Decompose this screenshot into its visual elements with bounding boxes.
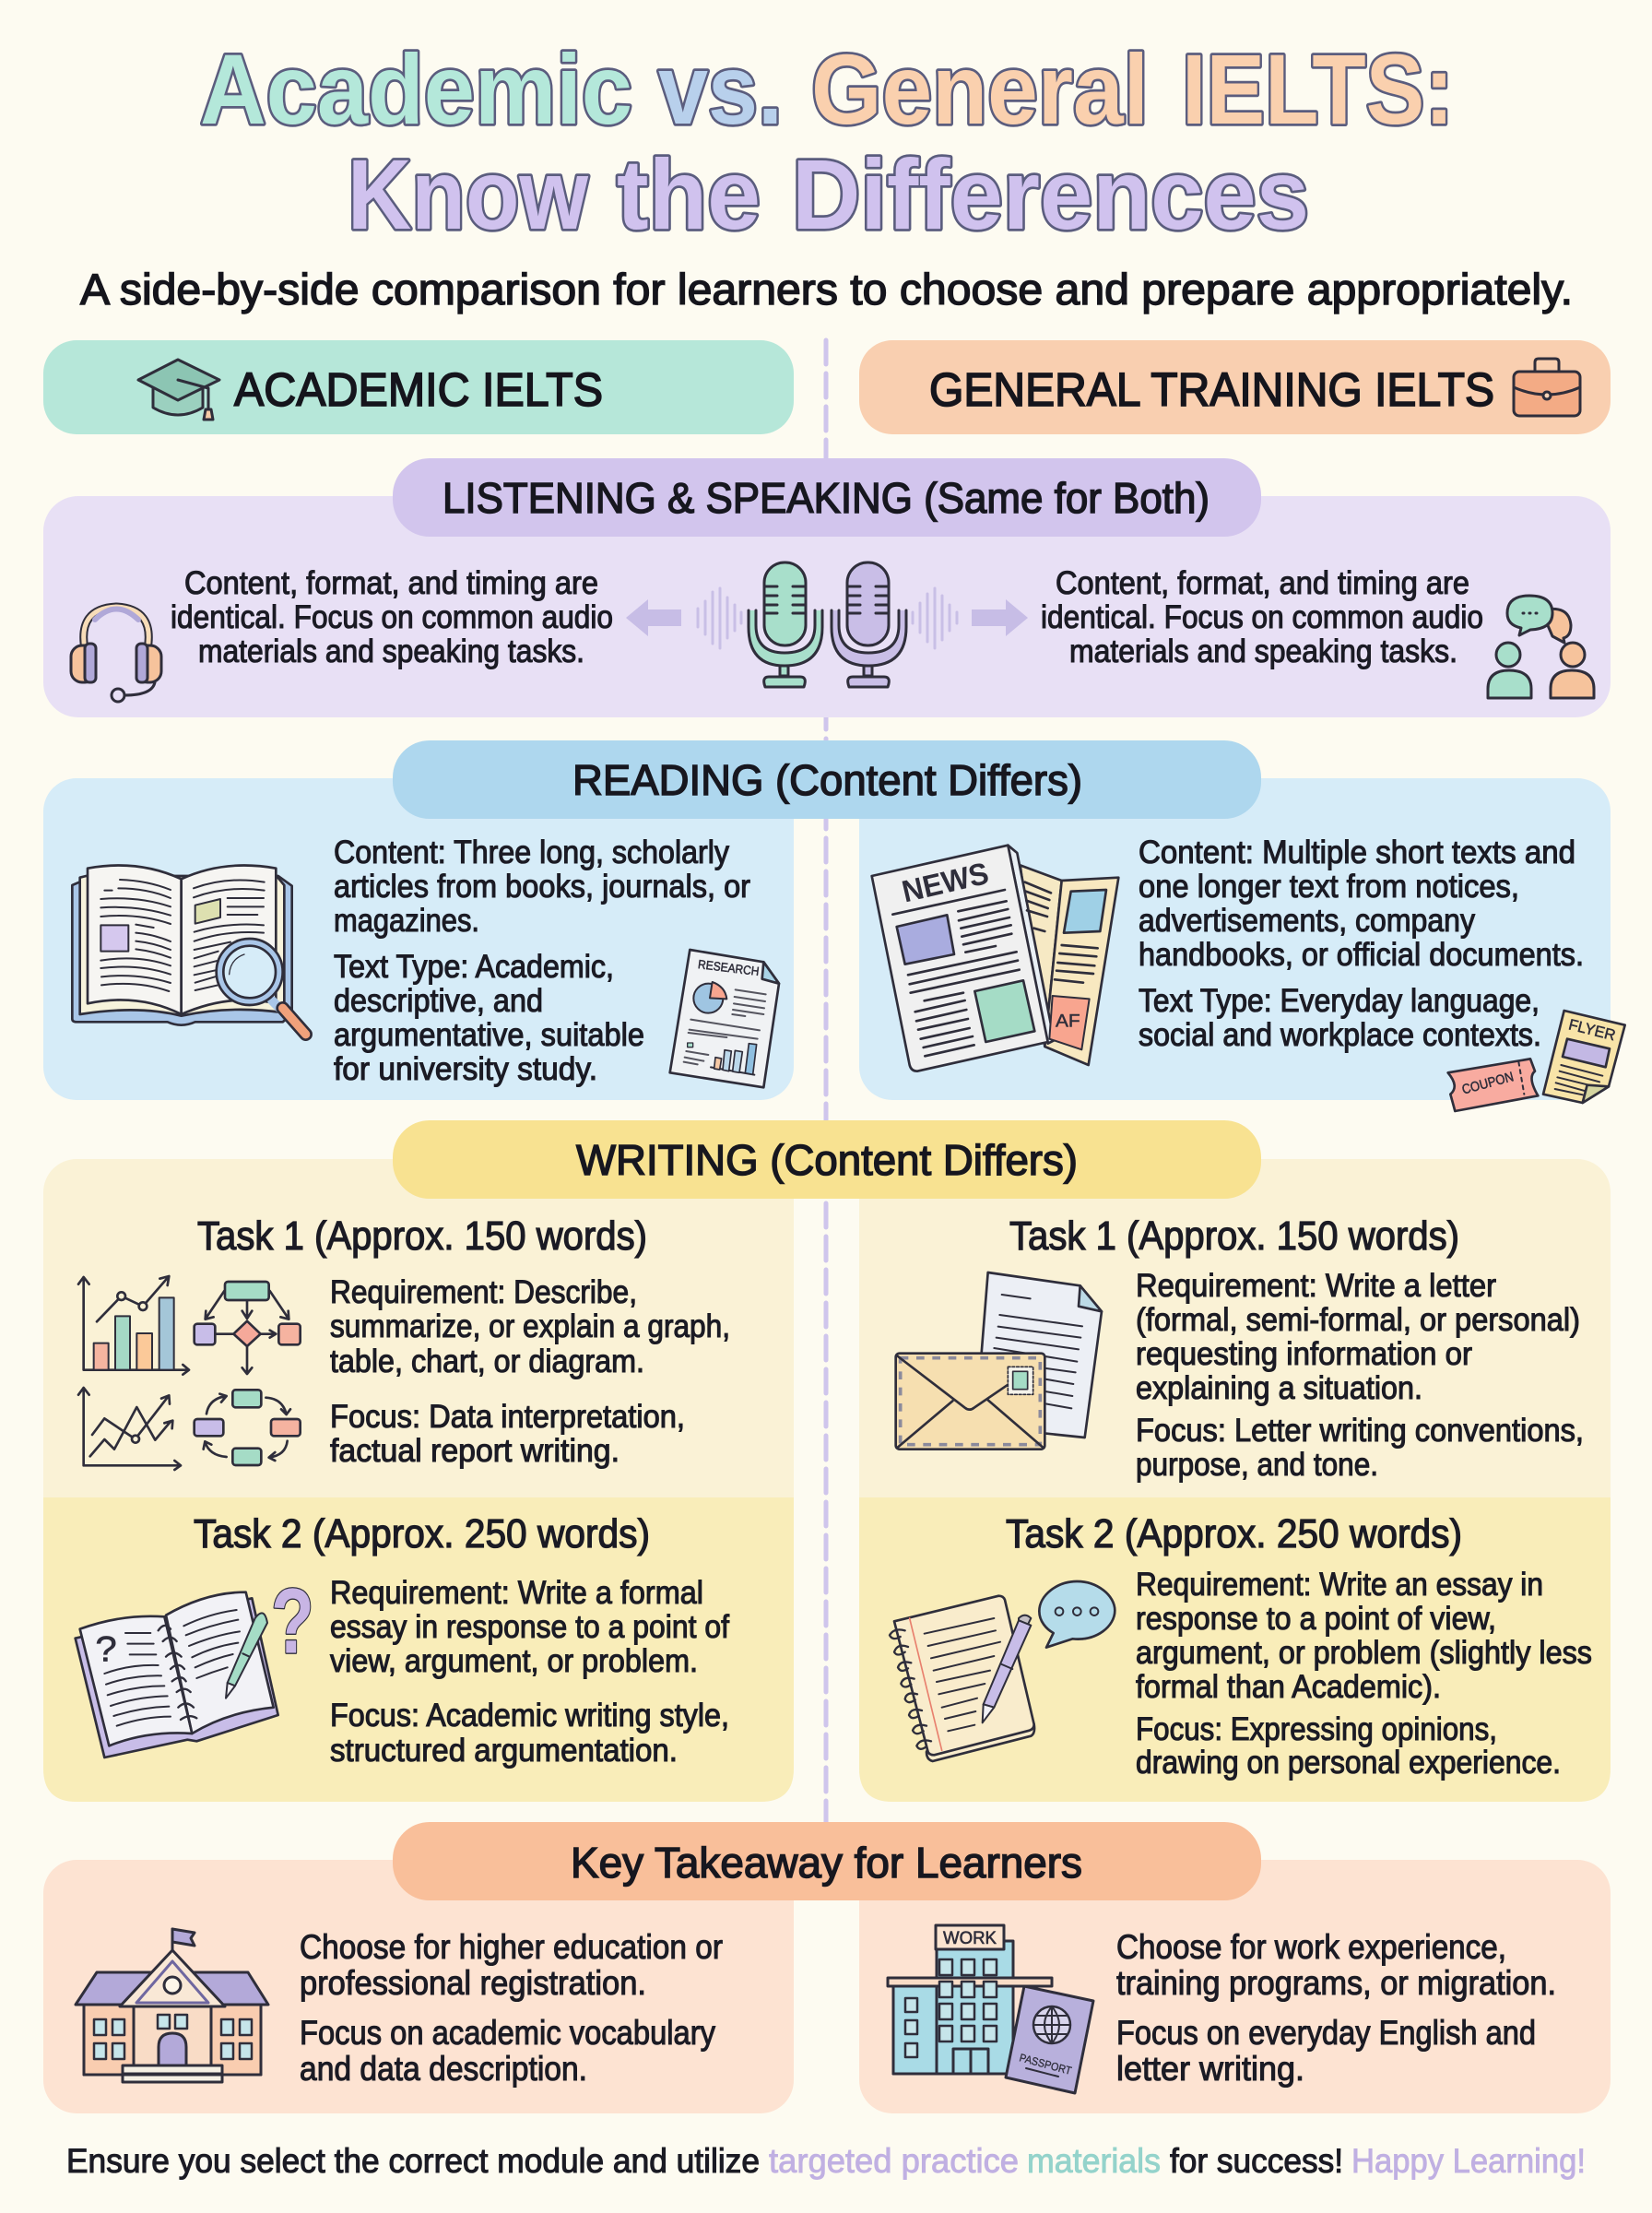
text: listening speaking general: identical. Focus on common audio <box>1041 599 1483 635</box>
panel: takeaway academic <box>43 1860 794 2113</box>
text: task 1 general: purpose, and tone. <box>1136 1447 1378 1483</box>
header: academic ielts: ACADEMIC IELTS <box>234 363 603 416</box>
panel: takeaway general <box>859 1860 1611 2113</box>
text: reading general: one longer text from notices, <box>1139 869 1519 905</box>
text: reading academic: argumentative, suitable <box>334 1017 644 1053</box>
icon: newspaper and brochure: AF <box>1056 1012 1080 1031</box>
heading pill: key takeaway: Key Takeaway for Learners <box>571 1839 1082 1887</box>
text: reading academic: Content: Three long, scholarly <box>334 834 729 870</box>
panel: reading academic <box>43 778 794 1100</box>
text: reading academic: magazines. <box>334 903 479 939</box>
text: listening speaking academic: materials and speaking tasks. <box>198 633 584 669</box>
text: listening speaking academic: Content, format, and timing are <box>184 565 598 601</box>
text: listening speaking academic <box>171 565 613 669</box>
icon: microphone teal <box>749 562 822 687</box>
text: task 1 academic: summarize, or explain a graph, <box>330 1308 730 1344</box>
text: task 1 general: (formal, semi-formal, or personal) <box>1136 1302 1580 1338</box>
icon: newspaper and brochure: NEWS <box>899 857 992 909</box>
section: key takeaway <box>43 1822 1611 2113</box>
text: takeaway general: Choose for work experience, <box>1116 1928 1506 1966</box>
icon: briefcase <box>1514 359 1580 416</box>
icon: university building <box>76 1929 268 2082</box>
heading pill: listening and speaking: LISTENING & SPEAKING (Same for Both) <box>442 474 1210 522</box>
text: takeaway general <box>1116 1928 1556 2088</box>
icon: coupon and flyer <box>1448 1011 1625 1111</box>
heading pill: writing: WRITING (Content Differs) <box>576 1136 1078 1184</box>
icon: research paper <box>670 950 779 1087</box>
text: task 1 general: requesting information or <box>1136 1336 1472 1372</box>
icon: coupon and flyer: COUPON <box>1460 1070 1516 1098</box>
text: reading academic: for university study. <box>334 1051 597 1087</box>
text: task 1 academic: Requirement: Describe, <box>330 1274 637 1310</box>
text: task 1 general: explaining a situation. <box>1136 1370 1422 1406</box>
header: general training ielts: GENERAL TRAINING IELTS <box>929 363 1494 416</box>
icon: spiral notepad with pen and speech bubble <box>890 1581 1115 1761</box>
header: academic ielts <box>43 340 794 434</box>
text: takeaway academic: Focus on academic vocabulary <box>300 2014 715 2052</box>
text: reading academic <box>334 834 750 1087</box>
heading: task 1 academic: Task 1 (Approx. 150 words) <box>197 1213 647 1259</box>
text: task 1 general: Focus: Letter writing conventions, <box>1136 1413 1584 1449</box>
text: reading general: Content: Multiple short texts and <box>1139 834 1575 870</box>
text: takeaway academic: Choose for higher education or <box>300 1928 723 1966</box>
text: task 2 academic: structured argumentation. <box>330 1733 678 1769</box>
panel: listening and speaking <box>43 458 1611 717</box>
panel: reading general <box>859 778 1625 1111</box>
text: task 2 academic: essay in response to a point of <box>330 1609 729 1645</box>
footer message: Ensure you select the correct module and utilize <box>66 2142 760 2180</box>
heading pill: key takeaway <box>393 1822 1261 1900</box>
icon: notebook with pen and question mark: ? <box>271 1570 314 1674</box>
text: task 1 academic: Focus: Data interpretation, <box>330 1399 685 1435</box>
section: reading <box>43 740 1625 1111</box>
heading: task 1 general: Task 1 (Approx. 150 words) <box>1009 1213 1459 1259</box>
text: task 1 general: Requirement: Write a letter <box>1136 1268 1496 1304</box>
text: task 2 general: formal than Academic). <box>1136 1669 1441 1705</box>
text: task 1 academic: table, chart, or diagram. <box>330 1343 644 1379</box>
footer message: targeted practice <box>769 2142 1019 2180</box>
icon: people talking <box>1488 596 1594 698</box>
text: reading general: handbooks, or official documents. <box>1139 937 1584 973</box>
text: task 2 general: Requirement: Write an essay in <box>1136 1567 1543 1603</box>
title: the <box>617 138 761 250</box>
text: takeaway academic: and data description. <box>300 2050 587 2088</box>
icon: envelope and letter <box>896 1272 1102 1450</box>
heading pill: reading: READING (Content Differs) <box>572 756 1082 804</box>
text: reading general: Text Type: Everyday language, <box>1139 983 1540 1019</box>
text: reading academic: Text Type: Academic, <box>334 949 614 985</box>
text: task 2 academic <box>330 1575 729 1769</box>
footer message: materials <box>1027 2142 1161 2180</box>
title: Differences <box>792 138 1309 250</box>
title: IELTS: <box>1182 33 1454 145</box>
icon: graduation cap <box>138 360 219 420</box>
text: task 2 academic: Requirement: Write a formal <box>330 1575 703 1611</box>
icon: coupon and flyer: FLYER <box>1567 1015 1617 1044</box>
heading pill: listening and speaking <box>393 458 1261 537</box>
text: reading general: social and workplace contexts. <box>1139 1017 1541 1053</box>
title <box>200 33 1454 250</box>
arrow: left <box>626 599 681 636</box>
text: task 1 academic: factual report writing. <box>330 1433 620 1469</box>
title: vs. <box>658 33 783 145</box>
icon: charts and diagrams <box>78 1276 301 1470</box>
text: task 1 general <box>1136 1268 1584 1483</box>
footer message: for success! <box>1170 2142 1343 2180</box>
text: task 1 academic <box>330 1274 730 1469</box>
text: takeaway general: training programs, or migration. <box>1116 1964 1556 2002</box>
icon: notebook with pen and question mark: ? <box>95 1629 117 1670</box>
icon: research paper: RESEARCH <box>697 957 760 978</box>
text: takeaway general: Focus on everyday English and <box>1116 2014 1536 2052</box>
icon: headphones <box>71 607 161 702</box>
icon: sound wave right <box>913 588 957 648</box>
text: reading general <box>1139 834 1584 1053</box>
subtitle: A side-by-side comparison for learners to choose and prepare appropriately. <box>80 265 1573 314</box>
heading pill: reading <box>393 740 1261 819</box>
title: Know <box>348 138 589 250</box>
text: task 2 general: Focus: Expressing opinions, <box>1136 1711 1497 1747</box>
text: task 2 general: drawing on personal experience. <box>1136 1745 1561 1781</box>
text: takeaway academic: professional registration. <box>300 1964 646 2002</box>
icon: newspaper and brochure <box>872 846 1118 1071</box>
text: reading academic: articles from books, journals, or <box>334 869 750 905</box>
text: task 2 academic: view, argument, or problem. <box>330 1643 698 1679</box>
text: task 2 general: argument, or problem (slightly less <box>1136 1635 1592 1671</box>
text: listening speaking general <box>1041 565 1483 669</box>
text: reading general: advertisements, company <box>1139 903 1475 939</box>
panel: writing general <box>859 1159 1611 1802</box>
text: reading academic: descriptive, and <box>334 983 543 1019</box>
icon: office building and passport <box>888 1925 1093 2093</box>
icon: open book with magnifier <box>72 866 306 1035</box>
icon: microphone purple <box>832 562 906 687</box>
icon: office building and passport: PASSPORT <box>1018 2051 1073 2077</box>
icon: sound wave left <box>698 588 741 648</box>
text: task 2 academic: Focus: Academic writing style, <box>330 1698 729 1734</box>
arrow: right <box>972 599 1028 636</box>
text: listening speaking general: Content, format, and timing are <box>1056 565 1469 601</box>
text: task 2 general: response to a point of view, <box>1136 1601 1496 1637</box>
heading pill: writing <box>393 1120 1261 1199</box>
heading: task 2 general: Task 2 (Approx. 250 words) <box>1006 1511 1462 1556</box>
footer message <box>66 2142 1586 2180</box>
text: takeaway academic <box>300 1928 723 2088</box>
text: listening speaking academic: identical. Focus on common audio <box>171 599 613 635</box>
icon: office building and passport: WORK <box>943 1929 997 1948</box>
header: general training ielts <box>859 340 1611 434</box>
panel: writing academic <box>43 1159 794 1802</box>
icon: notebook with pen and question mark <box>76 1570 314 1757</box>
text: takeaway general: letter writing. <box>1116 2050 1304 2088</box>
title: Academic <box>200 33 632 145</box>
heading: task 2 academic: Task 2 (Approx. 250 words) <box>194 1511 650 1556</box>
section: writing <box>43 1120 1611 1802</box>
text: listening speaking general: materials and speaking tasks. <box>1069 633 1457 669</box>
footer message: Happy Learning! <box>1351 2142 1586 2180</box>
title: General <box>811 33 1149 145</box>
text: task 2 general <box>1136 1567 1592 1781</box>
